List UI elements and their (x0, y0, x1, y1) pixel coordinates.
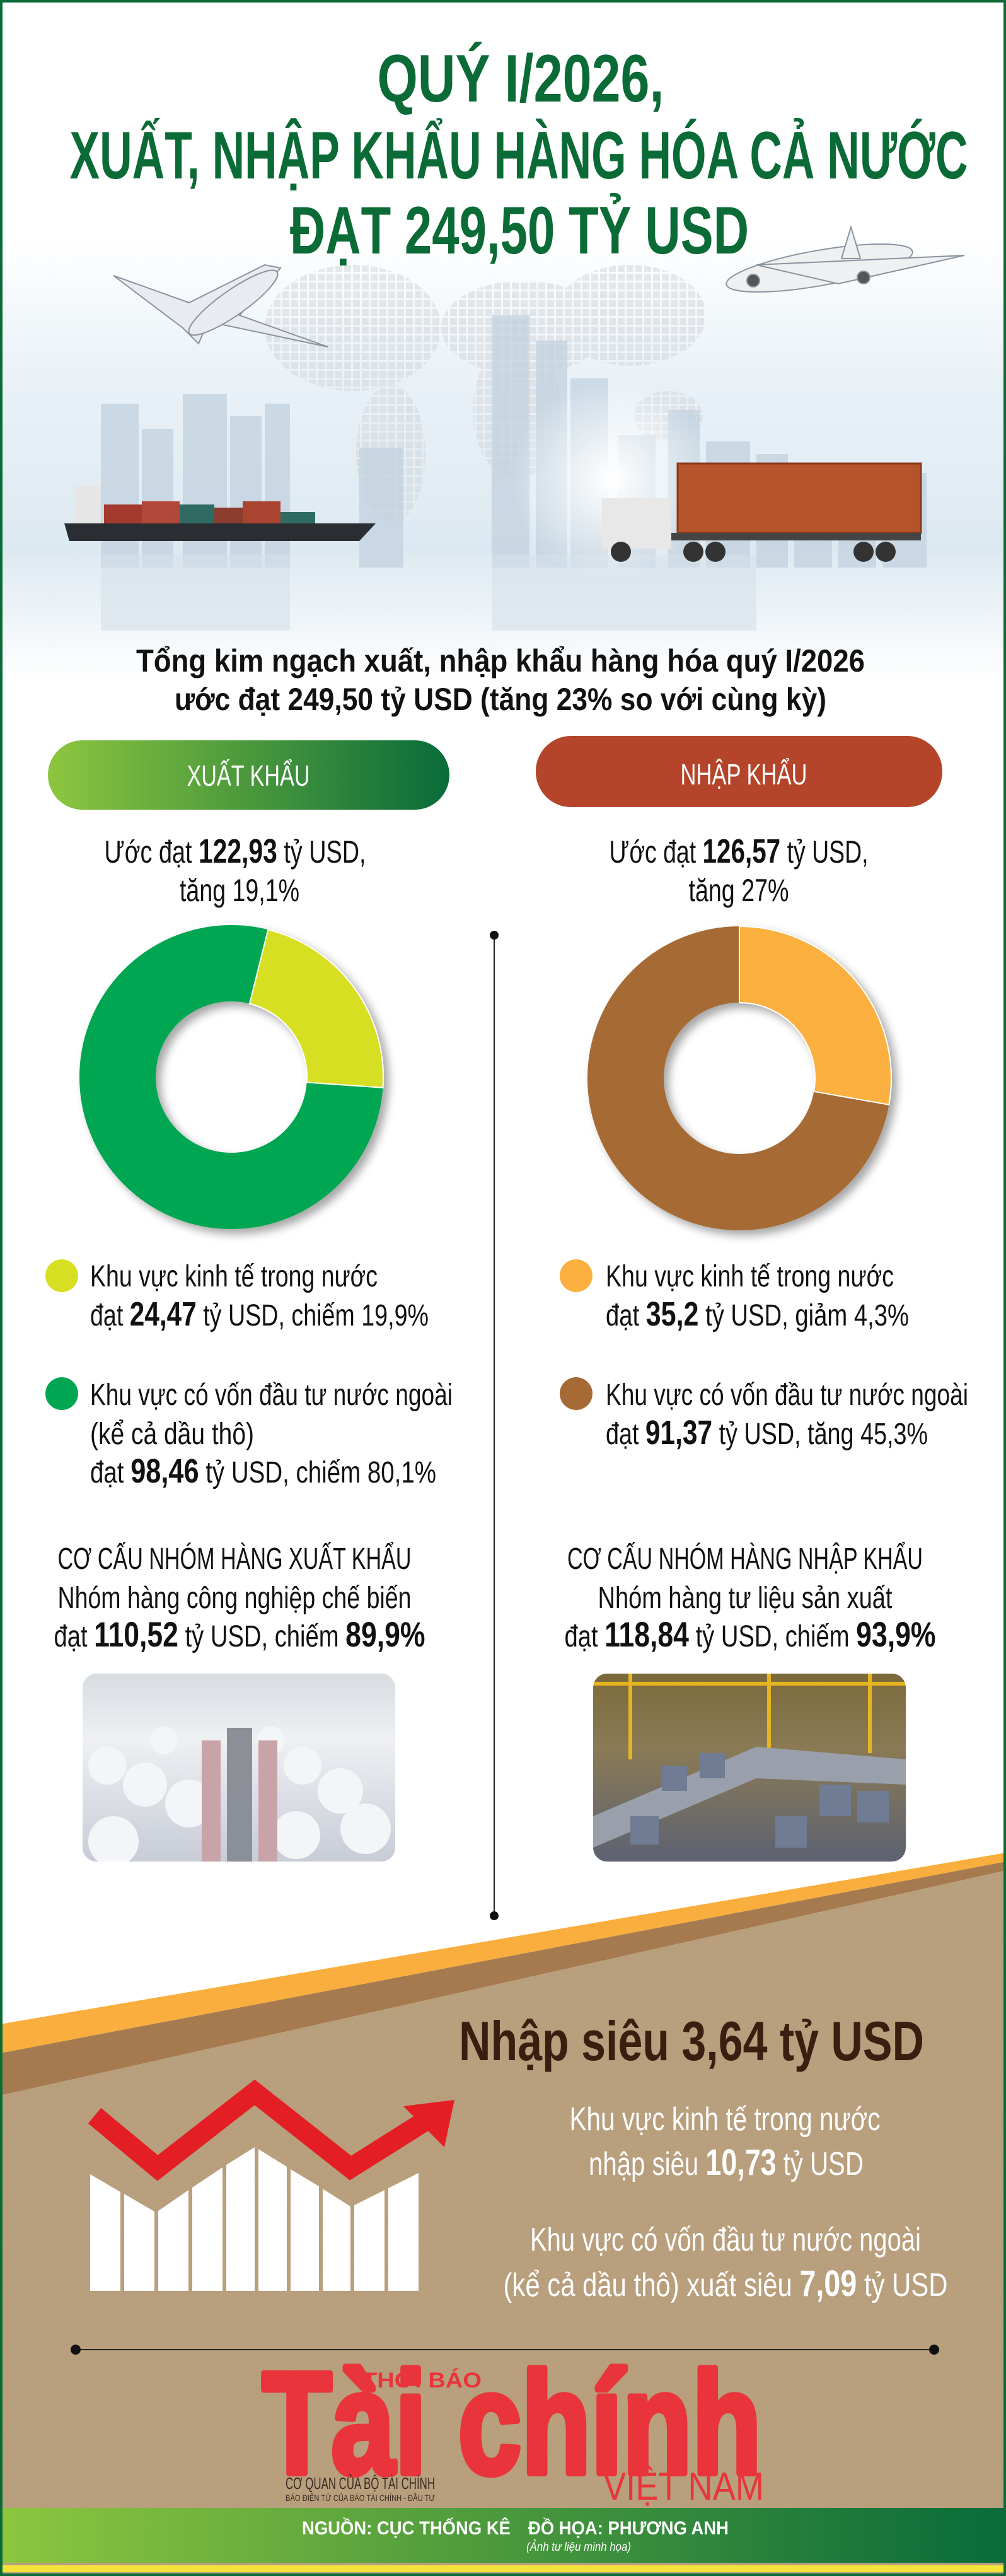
legend: import: đạt 91,37 tỷ USD, tăng 45,3% (606, 1414, 928, 1452)
export structure text: Nhóm hàng công nghiệp chế biến (58, 1582, 411, 1615)
trade balance details: nhập siêu 10,73 tỷ USD (589, 2142, 864, 2183)
import total: Ước đạt 126,57 tỷ USD, (609, 832, 869, 870)
logo: Thời báo Tài chính Việt Nam: CƠ QUAN CỦA BỘ TÀI CHÍNH (286, 2473, 435, 2493)
import structure text (565, 1542, 935, 1654)
pill: xuất khẩu: XUẤT KHẨU (187, 759, 310, 792)
icon: truck with container (602, 463, 921, 562)
export total (105, 832, 366, 908)
legend: import (560, 1259, 968, 1452)
logo: Thời báo Tài chính Việt Nam: Tài chính (262, 2342, 761, 2504)
trade balance details (503, 2101, 947, 2304)
legend: export: đạt 98,46 tỷ USD, chiếm 80,1% (90, 1452, 436, 1490)
subtitle: ước đạt 249,50 tỷ USD (tăng 23% so với cùng kỳ) (175, 682, 826, 717)
export structure text (54, 1542, 425, 1654)
divider line with dots (71, 2345, 939, 2355)
icon: container ship (64, 486, 376, 541)
title (69, 40, 968, 268)
logo: Thời báo Tài chính Việt Nam: THỜI BÁO (362, 2369, 482, 2392)
title: QUÝ I/2026, (377, 40, 664, 116)
donut chart: export (117, 930, 383, 1191)
icon: plane left (113, 262, 328, 347)
photo: industrial conveyor factory (593, 1674, 906, 1862)
footer: source credits: NGUỒN: CỤC THỐNG KÊ (302, 2517, 511, 2539)
donut chart: import (625, 926, 891, 1192)
footer: source credits: ĐỒ HỌA: PHƯƠNG ANH (528, 2517, 729, 2539)
import structure text: đạt 118,84 tỷ USD, chiếm 93,9% (565, 1614, 935, 1654)
legend: export: (kể cả dầu thô) (90, 1418, 254, 1451)
legend: export: Khu vực kinh tế trong nước (90, 1260, 378, 1293)
legend: export (45, 1259, 453, 1490)
footer: source credits: (Ảnh tư liệu minh họa) (526, 2540, 631, 2554)
legend: import: Khu vực kinh tế trong nước (606, 1260, 894, 1293)
import total: tăng 27% (688, 873, 789, 908)
legend: export: đạt 24,47 tỷ USD, chiếm 19,9% (90, 1295, 429, 1333)
subtitle: Tổng kim ngạch xuất, nhập khẩu hàng hóa quý I/2026 (136, 643, 865, 679)
export structure text: CƠ CẤU NHÓM HÀNG XUẤT KHẨU (58, 1542, 411, 1576)
import total (609, 832, 869, 908)
export total: Ước đạt 122,93 tỷ USD, (105, 832, 366, 870)
export structure text: đạt 110,52 tỷ USD, chiếm 89,9% (54, 1614, 425, 1654)
center divider (490, 931, 499, 1920)
diagonal band and cardboard background (0, 1848, 1006, 2576)
pill: xuất khẩu (48, 740, 449, 810)
subtitle (136, 643, 865, 717)
footer: source credits (0, 2508, 1006, 2572)
pill: nhập khẩu (536, 736, 942, 807)
legend: import: đạt 35,2 tỷ USD, giảm 4,3% (606, 1295, 909, 1333)
legend: export: Khu vực có vốn đầu tư nước ngoài (90, 1378, 453, 1412)
export total: tăng 19,1% (180, 873, 299, 908)
logo: Thời báo Tài chính Việt Nam: BÁO ĐIỆN TỬ CỦA BÁO TÀI CHÍNH - ĐẦU TƯ (286, 2492, 435, 2503)
icon: bar chart with red arrow (90, 2092, 454, 2291)
trade balance details: (kể cả dầu thô) xuất siêu 7,09 tỷ USD (503, 2263, 947, 2304)
trade balance details: Khu vực kinh tế trong nước (570, 2101, 880, 2138)
photo: food processing factory (83, 1674, 395, 1867)
import structure text: Nhóm hàng tư liệu sản xuất (598, 1582, 893, 1615)
world map (265, 265, 706, 523)
icon: plane right (723, 227, 964, 302)
hero illustration (0, 227, 1006, 681)
title: ĐẠT 249,50 TỶ USD (290, 192, 749, 268)
logo: Thời báo Tài chính Việt Nam: VIỆT NAM (603, 2465, 764, 2509)
skyline (101, 315, 927, 568)
pill: nhập khẩu: NHẬP KHẨU (681, 758, 807, 791)
